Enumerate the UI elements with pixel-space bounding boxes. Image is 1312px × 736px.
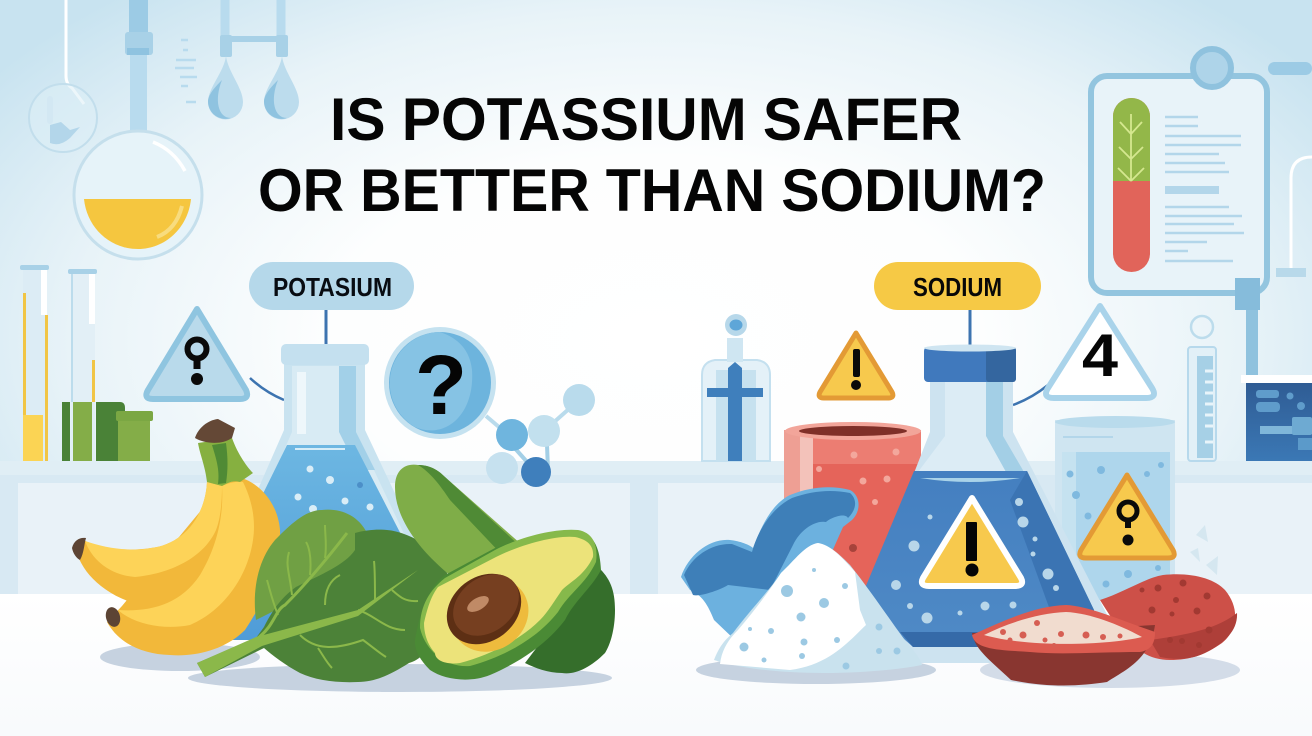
icon: question triangle left — [146, 309, 284, 400]
small left cross bottle — [702, 314, 770, 461]
left test tubes and boxes — [20, 265, 153, 461]
right lab tube and device — [1188, 316, 1312, 461]
icon: question warning triangle — [1080, 475, 1174, 558]
title: IS POTASSIUM SAFER — [330, 86, 962, 153]
sodium flask — [840, 344, 1115, 663]
icon: number 4 triangle — [1013, 306, 1154, 405]
label: potassium: POTASIUM — [273, 272, 392, 302]
salt pile — [696, 543, 936, 684]
top-left glassware — [29, 0, 299, 259]
shadow under potassium foods — [100, 643, 612, 692]
potassium flask — [205, 344, 450, 640]
label: sodium: SODIUM — [913, 272, 1002, 302]
label: potassium — [249, 262, 414, 346]
top-right clipboard — [1091, 49, 1312, 376]
icon: large warning triangle — [922, 498, 1022, 586]
icon: question circle: ? — [415, 338, 467, 432]
icon: warning triangle small — [819, 333, 893, 398]
salt chips — [1190, 525, 1218, 575]
icon: number 4 triangle: 4 — [1082, 322, 1119, 389]
molecule — [486, 384, 595, 487]
title — [258, 86, 1046, 224]
salt scoop — [681, 487, 859, 640]
spinach leaf — [197, 510, 448, 682]
label: sodium — [874, 262, 1041, 346]
icon: question circle — [384, 327, 496, 439]
table surface — [0, 594, 1312, 736]
lab bench — [0, 461, 1312, 595]
avocado — [395, 465, 615, 680]
banana bunch — [72, 419, 280, 655]
glass beaker — [1055, 416, 1175, 600]
red cup — [784, 422, 921, 610]
title: OR BETTER THAN SODIUM? — [258, 157, 1046, 224]
red meat and bowl — [972, 574, 1240, 688]
